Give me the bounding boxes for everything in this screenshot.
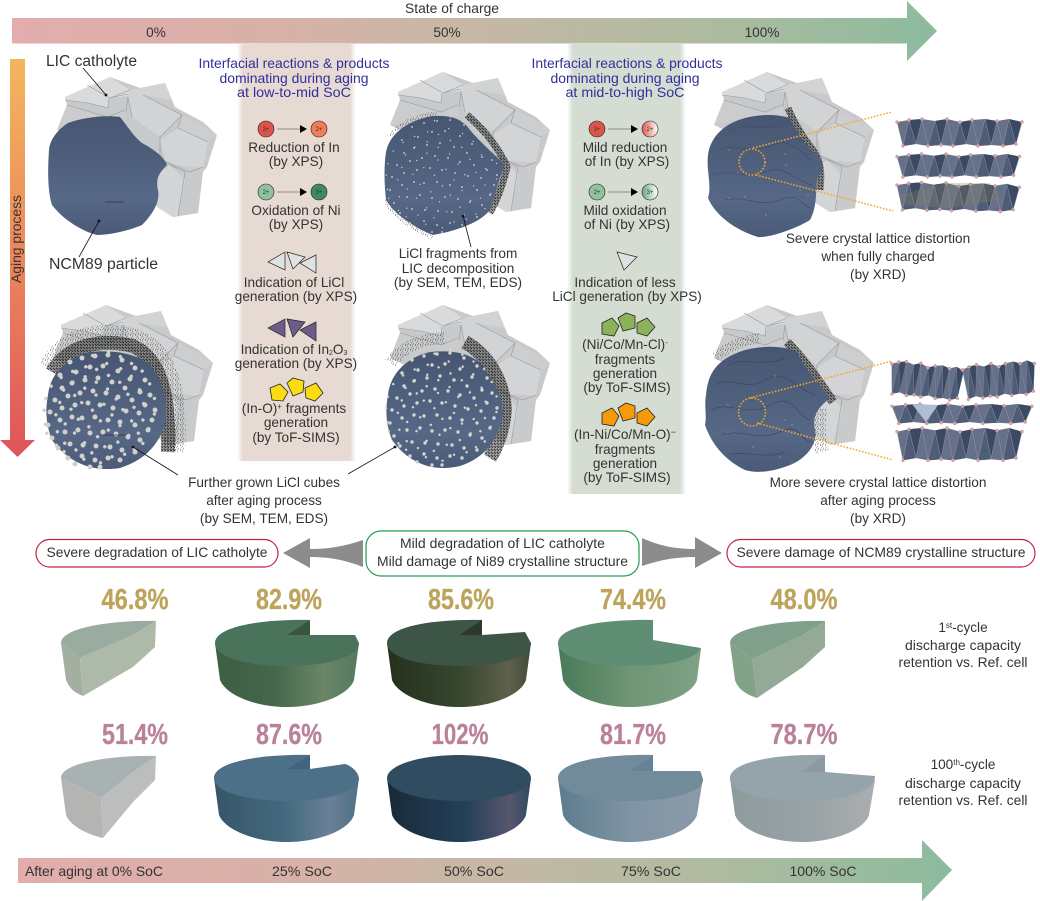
- text: In-Ni/Co/Mn-O fragments: −: [671, 427, 676, 437]
- icon: LiCl triangles: [268, 252, 316, 273]
- text: LiCl generation: [235, 275, 357, 304]
- label: severe crystal lattice distortion: when fully charged: [820, 249, 935, 264]
- pie: 100th cycle 100% SoC 78.7%: 78.7%: [770, 719, 838, 751]
- tick: 50%: 50%: [433, 25, 461, 40]
- pie: 100th cycle 25% SoC 87.6%: 87.6%: [256, 719, 322, 751]
- particle: top middle 50% SoC: [366, 72, 550, 252]
- text: less LiCl generation: Indication of less: [574, 275, 676, 290]
- text: In-Ni/Co/Mn-O fragments: [574, 427, 676, 485]
- text: less LiCl generation: LiCl generation (by XPS): [552, 289, 702, 304]
- pie: 1st cycle 25% SoC 82.9%: 82.9%: [256, 584, 322, 616]
- text: mild oxidation: [583, 203, 670, 232]
- zoom callout: bottom: [738, 361, 893, 460]
- text: mild reduction: of In (by XPS): [585, 154, 669, 169]
- text: less LiCl generation: [552, 275, 702, 304]
- label: LIC catholyte: [46, 53, 137, 96]
- pie: 100th cycle 0% SoC 51.4%: [61, 719, 168, 838]
- heading: low-to-mid SoC: at low-to-mid SoC: [237, 85, 351, 100]
- text: mild reduction: [583, 140, 669, 169]
- pie: 100th cycle 100% SoC 78.7%: [730, 719, 875, 842]
- text: LiCl generation: generation (by XPS): [235, 289, 357, 304]
- label: further grown LiCl cubes: (by SEM, TEM, EDS): [200, 511, 328, 526]
- text: In2O3 generation: O: [333, 342, 344, 357]
- text: mild oxidation: of Ni (by XPS): [584, 217, 670, 232]
- label: severe crystal lattice distortion: (by XRD): [850, 267, 906, 282]
- pie: 1st cycle 25% SoC 82.9%: [215, 584, 359, 707]
- label: LiCl fragments: LiCl fragments from: [399, 246, 517, 261]
- panel: low-to-mid SoC band: [237, 44, 356, 461]
- particle: top right 100% SoC: [708, 72, 874, 237]
- row label: 1st cycle retention: retention vs. Ref. cell: [898, 655, 1028, 670]
- label: LiCl fragments: [394, 215, 522, 290]
- pie: 1st cycle 75% SoC 74.4%: [558, 584, 701, 707]
- aging process arrow: [0, 59, 35, 457]
- icon: mild reduction of In: 3+: [594, 127, 601, 133]
- text: In-O fragments: (In-O): [242, 401, 277, 416]
- label: LIC catholyte: LIC catholyte: [46, 53, 137, 70]
- label: LiCl fragments: LIC decomposition: [402, 261, 514, 276]
- heading: mid-to-high SoC: Interfacial reactions & products: [532, 56, 723, 71]
- label: NCM89 particle: NCM89 particle: [49, 256, 158, 273]
- text: oxidation of Ni: [251, 203, 341, 232]
- particle: bottom left aged at 0% SoC: [24, 305, 213, 487]
- row label: 100th cycle retention: discharge capacity: [905, 776, 1021, 791]
- callout: mild degradation: Mild degradation of LIC catholyte: [400, 536, 605, 551]
- row label: 1st cycle retention: -cycle: [952, 620, 988, 635]
- callout: severe degradation of LIC catholyte: Severe degradation of LIC catholyte: [46, 545, 268, 560]
- pie: 1st cycle 50% SoC 85.6%: [387, 584, 531, 707]
- text: In-Ni/Co/Mn-O fragments: fragments: [595, 442, 655, 457]
- icon: oxidation of Ni: [258, 184, 327, 200]
- label: more severe crystal lattice distortion: [770, 475, 986, 526]
- panel: mid-to-high SoC band: [567, 44, 686, 494]
- label: severe crystal lattice distortion: [786, 231, 970, 282]
- arrow: toward crystalline damage: [642, 537, 722, 568]
- text: In-Ni/Co/Mn-O fragments: generation: [593, 456, 657, 471]
- zoom callout: top: [739, 112, 893, 211]
- label: NCM89 particle: [49, 220, 158, 273]
- icon: reduction of In: [258, 121, 327, 137]
- arrow: toward catholyte degradation: [283, 538, 363, 568]
- icon: reduction of In: 3+: [263, 127, 270, 133]
- text: In2O3 generation: 3: [344, 350, 348, 357]
- label: further grown LiCl cubes: Further grown LiCl cubes: [188, 475, 340, 490]
- text: In-O fragments: fragments: [282, 401, 346, 416]
- row label: 100th cycle retention: retention vs. Ref. cell: [898, 793, 1028, 808]
- icon: mild oxidation of Ni: 2+: [594, 190, 601, 196]
- particle: bottom right aged at 100% SoC: [705, 305, 874, 472]
- heading: mid-to-high SoC: at mid-to-high SoC: [566, 85, 685, 100]
- heading: low-to-mid SoC: [198, 56, 390, 100]
- row label: 1st cycle retention: [898, 620, 1028, 670]
- icon: reduction of In: 2+: [316, 127, 323, 133]
- text: In-O fragments: +: [277, 402, 282, 411]
- heading: mid-to-high SoC: [532, 56, 723, 100]
- tick: 75% SoC: 75% SoC: [621, 864, 681, 879]
- pie: 100th cycle 50% SoC 102%: [387, 719, 531, 842]
- text: reduction of In: [248, 140, 340, 169]
- particle: bottom middle aged at 50% SoC: [366, 305, 550, 485]
- callout: mild degradation: [366, 531, 639, 576]
- text: In-O fragments: [242, 401, 346, 445]
- icon: yellow pentagons: [270, 378, 323, 401]
- tick: 100% SoC: 100% SoC: [790, 864, 857, 879]
- pie: 100th cycle 75% SoC 81.7%: 81.7%: [600, 719, 666, 751]
- text: oxidation of Ni: (by XPS): [269, 217, 323, 232]
- text: Ni/Co/Mn-Cl fragments: -: [665, 338, 668, 347]
- text: Ni/Co/Mn-Cl fragments: (by ToF-SIMS): [583, 380, 671, 395]
- text: Ni/Co/Mn-Cl fragments: [582, 337, 671, 395]
- label: severe crystal lattice distortion: Severe crystal lattice distortion: [786, 231, 970, 246]
- text: Ni/Co/Mn-Cl fragments: fragments: [595, 352, 655, 367]
- row label: 1st cycle retention: st: [946, 621, 953, 630]
- text: Ni/Co/Mn-Cl fragments: generation: [593, 366, 657, 381]
- tick: after aging at 0% SoC: After aging at 0% SoC: [25, 864, 163, 879]
- callout: severe damage of NCM89: [727, 540, 1035, 567]
- icon: oxidation of Ni: 3+: [316, 190, 323, 196]
- row label: 100th cycle retention: -cycle: [960, 757, 995, 772]
- heading: low-to-mid SoC: dominating during aging: [220, 71, 368, 86]
- icon: orange pentagons: [602, 403, 655, 426]
- icon: single LiCl triangle: [617, 252, 637, 270]
- icon: green pentagons: [602, 313, 655, 336]
- icon: mild oxidation of Ni: 3+: [647, 190, 654, 196]
- text: mild oxidation: Mild oxidation: [583, 203, 667, 218]
- row label: 100th cycle retention: [898, 757, 1028, 808]
- label: more severe crystal lattice distortion: after aging process: [820, 493, 936, 508]
- pie: 1st cycle 50% SoC 85.6%: 85.6%: [428, 584, 494, 616]
- label: further grown LiCl cubes: [132, 446, 396, 526]
- pie: 1st cycle 100% SoC 48.0%: [730, 584, 838, 698]
- icon: mild oxidation of Ni: [589, 184, 658, 200]
- label: further grown LiCl cubes: after aging process: [206, 493, 322, 508]
- text: In2O3 generation: 2: [329, 350, 333, 357]
- pie: 1st cycle 100% SoC 48.0%: 48.0%: [770, 584, 838, 616]
- axis title: aging process: Aging process: [9, 195, 24, 283]
- pie: 100th cycle 50% SoC 102%: 102%: [432, 719, 489, 751]
- text: In-Ni/Co/Mn-O fragments: (In-Ni/Co/Mn-O): [574, 427, 671, 442]
- label: LiCl fragments: (by SEM, TEM, EDS): [394, 275, 522, 290]
- text: Ni/Co/Mn-Cl fragments: (Ni/Co/Mn-Cl): [582, 337, 665, 352]
- icon: mild reduction of In: [589, 121, 658, 137]
- text: In2O3 generation: Indication of In: [241, 342, 329, 357]
- row label: 1st cycle retention: 1: [938, 620, 946, 635]
- label: more severe crystal lattice distortion: (by XRD): [850, 511, 906, 526]
- tick: 100%: 100%: [745, 25, 779, 40]
- row label: 100th cycle retention: 100: [931, 757, 953, 772]
- icon: oxidation of Ni: 2+: [263, 190, 270, 196]
- text: reduction of In: (by XPS): [269, 154, 323, 169]
- text: In2O3 generation: generation (by XPS): [235, 356, 357, 371]
- tick: 50% SoC: 50% SoC: [444, 864, 504, 879]
- state of charge arrow: [12, 1, 937, 61]
- tick: 0%: 0%: [146, 25, 166, 40]
- text: LiCl generation: Indication of LiCl: [244, 275, 344, 290]
- particle: pristine at 0% SoC: [48, 77, 217, 235]
- pie: 1st cycle 0% SoC 46.8%: 46.8%: [102, 584, 169, 616]
- callout: severe damage of NCM89: Severe damage of NCM89 crystalline structure: [736, 545, 1026, 560]
- text: In-O fragments: (by ToF-SIMS): [252, 430, 340, 445]
- text: oxidation of Ni: Oxidation of Ni: [251, 203, 341, 218]
- heading: mid-to-high SoC: dominating during aging: [550, 71, 700, 86]
- pie: 100th cycle 0% SoC 51.4%: 51.4%: [102, 719, 168, 751]
- callout: severe degradation of LIC catholyte: [36, 540, 278, 567]
- callout: mild degradation: Mild damage of Ni89 crystalline structure: [377, 554, 628, 569]
- SoC axis arrow bottom: [18, 840, 952, 901]
- pie: 1st cycle 75% SoC 74.4%: 74.4%: [600, 584, 666, 616]
- crystal lattice: more severe distortion: [888, 360, 1037, 460]
- row label: 1st cycle retention: discharge capacity: [905, 638, 1021, 653]
- text: In-O fragments: generation: [264, 415, 328, 430]
- tick: 25% SoC: 25% SoC: [272, 864, 332, 879]
- icon: In2O3 triangles: [268, 319, 316, 341]
- icon: mild reduction of In: 2+: [647, 127, 654, 133]
- heading: low-to-mid SoC: Interfacial reactions & products: [198, 56, 390, 71]
- text: In2O3 generation: [235, 342, 357, 371]
- pie: 100th cycle 25% SoC 87.6%: [214, 719, 359, 842]
- pie: 100th cycle 75% SoC 81.7%: [558, 719, 703, 842]
- text: In-Ni/Co/Mn-O fragments: (by ToF-SIMS): [583, 470, 671, 485]
- axis title: state of charge: State of charge: [405, 1, 499, 16]
- text: reduction of In: Reduction of In: [248, 140, 340, 155]
- crystal lattice: severe distortion: [897, 119, 1022, 212]
- pie: 1st cycle 0% SoC 46.8%: [61, 584, 169, 696]
- text: mild reduction: Mild reduction: [583, 140, 667, 155]
- label: more severe crystal lattice distortion: More severe crystal lattice distortion: [770, 475, 986, 490]
- row label: 100th cycle retention: th: [953, 758, 960, 767]
